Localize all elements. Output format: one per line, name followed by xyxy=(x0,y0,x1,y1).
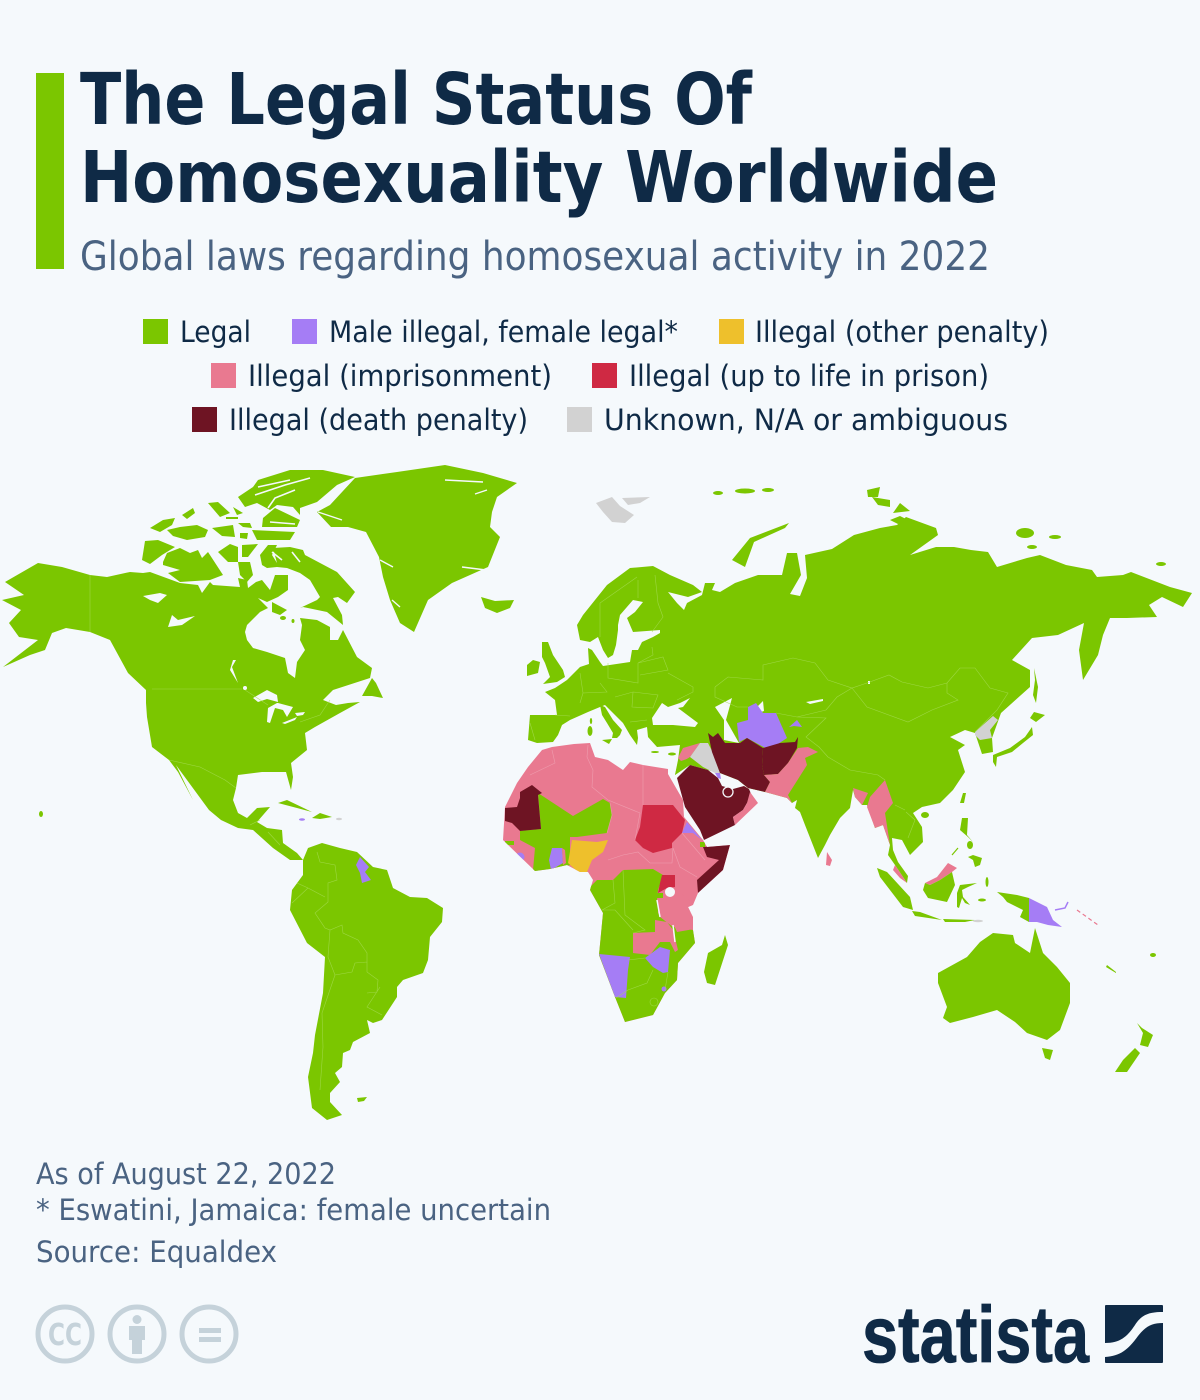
Svalbard xyxy=(596,497,650,523)
icon: no derivatives xyxy=(182,1307,236,1361)
Eswatini xyxy=(662,986,666,992)
Myanmar xyxy=(867,780,893,845)
Iceland xyxy=(481,597,514,613)
Somalia xyxy=(697,845,730,893)
Southeast Asia xyxy=(853,780,1029,922)
Afghanistan xyxy=(762,737,798,775)
Central Asia: Uzbekistan and Turkmenistan xyxy=(737,703,802,750)
Saudi Arabia and Yemen xyxy=(677,765,752,840)
legend item: legal xyxy=(143,315,251,349)
Israel and Jordan xyxy=(675,758,690,775)
Togo xyxy=(562,848,566,865)
footnotes: As of August 22, 2022 xyxy=(36,1157,336,1191)
Malaysia Borneo xyxy=(925,863,957,885)
legend item: male illegal, female legal: Male illegal, female legal* xyxy=(329,315,678,349)
Tasmania xyxy=(1042,1048,1053,1060)
North Korea xyxy=(975,716,998,740)
Eurasia xyxy=(528,517,1192,883)
southern Africa, legal xyxy=(590,869,695,1022)
Arctic islands xyxy=(713,487,1166,567)
title xyxy=(80,58,998,219)
Pacific islands xyxy=(1106,953,1156,973)
Greenland xyxy=(317,465,517,632)
legend xyxy=(143,315,1049,437)
Guinea-Bissau xyxy=(505,841,514,845)
legend item: illegal other penalty: Illegal (other penalty) xyxy=(755,315,1049,349)
Bangladesh xyxy=(853,788,868,805)
icon: creative commons: CC xyxy=(48,1318,82,1353)
Sierra Leone xyxy=(517,852,524,860)
icon: attribution xyxy=(110,1307,164,1361)
footnotes: Source: Equaldex xyxy=(36,1235,277,1269)
Zambia and Malawi xyxy=(633,920,678,955)
Uganda xyxy=(658,875,675,893)
Kuwait xyxy=(715,773,721,779)
legend item: unknown: Unknown, N/A or ambiguous xyxy=(604,403,1008,437)
Indonesia and Philippines xyxy=(877,793,1029,922)
Arctic channels and lakes of North America xyxy=(255,478,310,562)
Ghana xyxy=(549,848,563,870)
title: The Legal Status Of xyxy=(80,58,753,141)
footnotes xyxy=(36,1157,551,1269)
Madagascar xyxy=(704,935,728,985)
European islands xyxy=(527,642,676,756)
legend item: illegal death penalty: Illegal (death penalty) xyxy=(229,403,528,437)
Sahel, legal xyxy=(520,793,612,875)
world map xyxy=(2,465,1192,1120)
Kenya xyxy=(698,893,699,894)
Statista wordmark: statista xyxy=(862,1290,1089,1379)
Qatar marker xyxy=(723,787,733,797)
Australia xyxy=(938,928,1070,1040)
Rwanda and Burundi xyxy=(657,893,663,898)
North America xyxy=(2,470,383,860)
Djibouti xyxy=(700,842,705,847)
title: Homosexuality Worldwide xyxy=(80,136,998,219)
country borders xyxy=(90,575,1008,1090)
Tanzania xyxy=(658,906,692,932)
footnotes: * Eswatini, Jamaica: female uncertain xyxy=(36,1193,551,1227)
South America xyxy=(290,843,443,1120)
icon: creative commons xyxy=(38,1307,92,1361)
Sri Lanka xyxy=(826,852,832,866)
legend item: illegal imprisonment: Illegal (imprisonment) xyxy=(248,359,552,393)
Iran xyxy=(708,733,770,792)
Zimbabwe xyxy=(645,947,670,973)
Statista logo mark xyxy=(1105,1305,1163,1363)
Malaysia peninsula xyxy=(893,865,907,883)
Pakistan xyxy=(764,747,818,803)
Nigeria xyxy=(568,840,608,872)
Papua New Guinea xyxy=(1029,898,1068,927)
subtitle: Global laws regarding homosexual activity in 2022 xyxy=(80,234,990,280)
title accent bar xyxy=(36,73,64,269)
Mauritania xyxy=(505,785,542,831)
legend item: illegal up to life in prison: Illegal (up to life in prison) xyxy=(629,359,989,393)
Sudan xyxy=(635,805,685,853)
New Zealand xyxy=(1115,1023,1153,1072)
Guyana xyxy=(356,857,371,883)
Iraq xyxy=(690,743,720,773)
Eritrea xyxy=(682,822,702,840)
Oman xyxy=(733,792,758,825)
inland seas xyxy=(652,681,870,743)
Timor xyxy=(973,920,983,922)
Syria and Lebanon xyxy=(678,743,700,762)
Africa xyxy=(495,740,735,1033)
legend item: legal: Legal xyxy=(180,315,251,349)
Solomon Islands xyxy=(1077,910,1098,925)
African lakes xyxy=(657,887,675,942)
Sakhalin and Japan xyxy=(993,668,1045,767)
Namibia xyxy=(599,954,630,998)
Caribbean islands: Jamaica and Puerto Rico xyxy=(299,818,342,821)
